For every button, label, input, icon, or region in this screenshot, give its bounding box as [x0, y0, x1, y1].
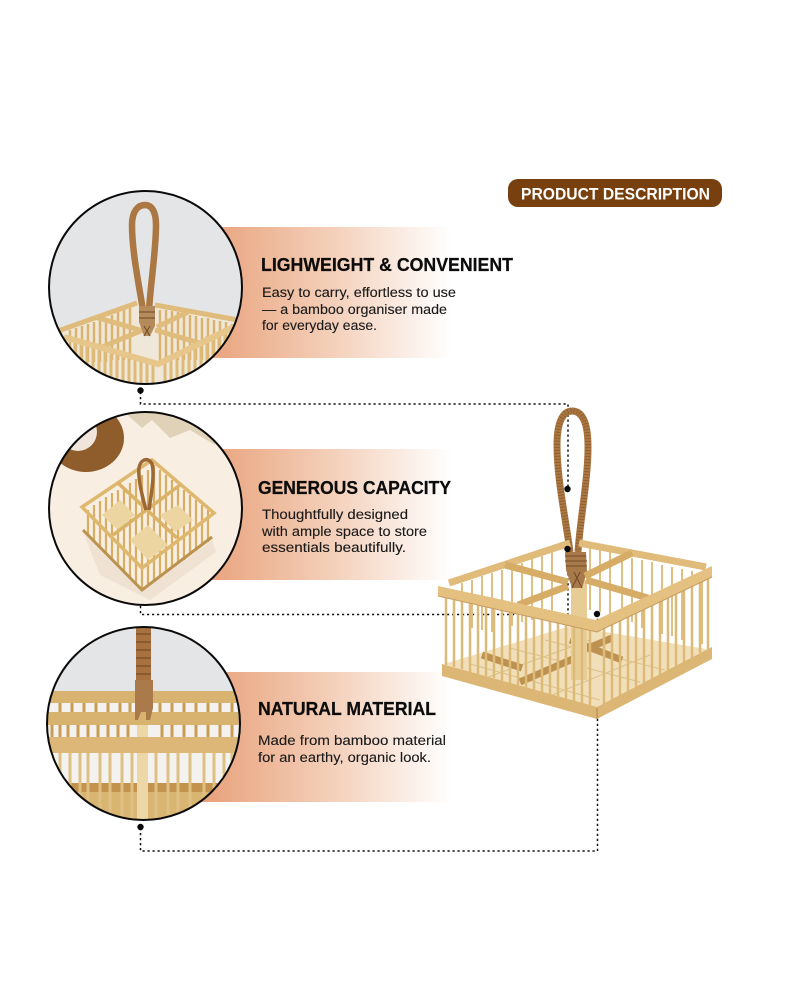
text block: generous capacity: Thoughtfully designed — [262, 507, 408, 522]
central post — [571, 580, 587, 680]
circle photo: overhead view — [48, 404, 243, 606]
center post — [137, 716, 148, 820]
circle photo: material close-up — [47, 627, 241, 822]
long bars — [60, 753, 232, 820]
badge: product description — [508, 179, 722, 207]
handle — [136, 628, 151, 680]
basket floor — [444, 626, 712, 712]
floor sections — [102, 500, 135, 530]
dotted connector lines — [140, 392, 598, 851]
bottom frame — [442, 647, 712, 719]
shadow — [83, 532, 216, 600]
main product photo: bamboo organiser — [438, 411, 712, 719]
rails — [47, 691, 241, 703]
handle loop — [132, 205, 156, 310]
text block: natural material: Made from bamboo material — [258, 733, 446, 748]
frame — [82, 460, 214, 568]
circle photo: handle close-up — [49, 191, 243, 386]
panel: capacity gradient band — [200, 449, 451, 580]
text block: natural material — [258, 698, 446, 765]
text block: lightweight and convenient: LIGHWEIGHT & CONVENIENT — [261, 254, 514, 275]
top frame rear rails — [449, 543, 706, 583]
cloth — [124, 412, 215, 445]
text block: lightweight and convenient: for everyday ease. — [262, 318, 377, 333]
floor dividers — [482, 638, 622, 682]
back bars — [462, 548, 702, 644]
handle loop — [557, 411, 588, 552]
text block: natural material: NATURAL MATERIAL — [258, 698, 436, 719]
text block: natural material: for an earthy, organic look. — [258, 750, 431, 765]
handle loop — [139, 460, 153, 510]
front bars — [446, 576, 708, 706]
badge: product description: PRODUCT DESCRIPTION — [521, 186, 710, 204]
text block: generous capacity: essentials beautifully. — [262, 540, 406, 555]
plate — [61, 418, 124, 472]
handle binding — [565, 552, 587, 588]
panel: lightweight gradient band — [200, 227, 451, 358]
panel: material gradient band — [200, 672, 451, 802]
text block: generous capacity — [258, 477, 452, 555]
upper bars — [52, 703, 232, 737]
text block: lightweight and convenient: — a bamboo organiser made — [262, 302, 447, 317]
text block: lightweight and convenient — [261, 254, 514, 333]
text block: generous capacity: with ample space to store — [261, 524, 427, 539]
front bars — [75, 326, 231, 386]
connector dots — [137, 387, 600, 830]
handle binding — [139, 306, 155, 336]
floor — [77, 792, 210, 819]
top frame front rails — [438, 566, 712, 632]
basket bars — [88, 465, 208, 590]
back bars — [70, 308, 232, 362]
text block: lightweight and convenient: Easy to carry, effortless to use — [262, 285, 456, 300]
rear floor rail — [72, 783, 218, 792]
text block: generous capacity: GENEROUS CAPACITY — [258, 477, 452, 498]
top frame dividers — [505, 553, 648, 605]
frame rails — [58, 303, 238, 347]
